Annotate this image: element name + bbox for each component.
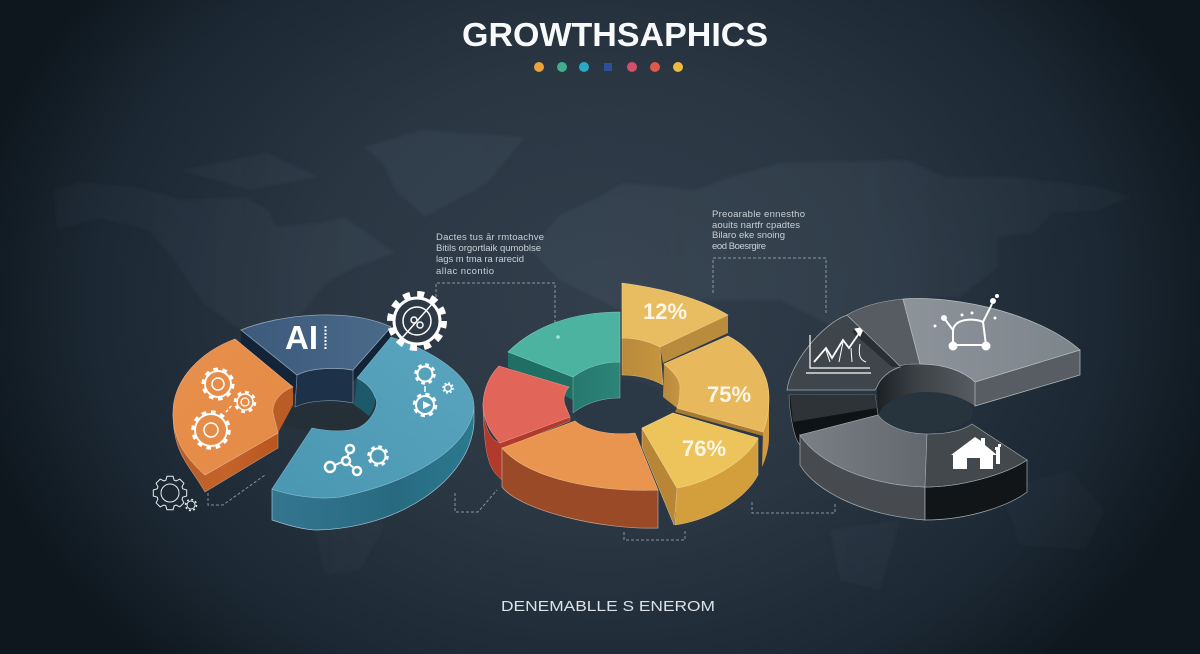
title: GROWTHSAPHICS xyxy=(462,16,768,53)
hole xyxy=(572,380,668,434)
segment: 12% xyxy=(622,283,728,385)
value: 12%: 12% xyxy=(643,299,687,324)
segment: dark stacked left xyxy=(789,395,878,445)
donut 3: grey pie xyxy=(787,294,1080,520)
icon: house xyxy=(951,437,1001,469)
text block: right annotation: aouits nartfr cpadtes xyxy=(712,220,800,231)
donut 1: AI pie xyxy=(153,294,474,530)
icon: outline gears xyxy=(153,476,196,510)
segment: blue xyxy=(272,337,474,530)
footer label: DENEMABLLE S ENEROM xyxy=(501,598,715,615)
text block: left annotation: lags m tma ra rarecid xyxy=(436,254,524,265)
icon: branching node xyxy=(934,294,998,350)
text block: left annotation: Dactes tus ār rmtoachve xyxy=(436,232,544,243)
icon: large percent gear xyxy=(390,294,444,348)
world map xyxy=(54,130,1132,590)
segment: light grey xyxy=(903,294,1080,406)
segment: 75% xyxy=(663,336,769,467)
text block: right annotation: Bilaro eke snoing xyxy=(712,230,785,241)
icon: orange gears xyxy=(193,369,255,448)
segment: orange xyxy=(502,421,658,528)
segment: orange xyxy=(173,339,293,492)
segment: mid grey xyxy=(847,299,920,366)
hole xyxy=(276,400,370,432)
segment: house xyxy=(925,424,1027,520)
segment: red xyxy=(483,366,570,480)
label: AI: AI xyxy=(285,319,318,356)
segment: 76% xyxy=(642,413,758,525)
segment: bottom light xyxy=(800,415,927,520)
icon: blue gears and network xyxy=(325,364,453,475)
inner wall xyxy=(877,364,975,415)
dashed connectors xyxy=(208,258,835,540)
text block: left annotation: allac ncontio xyxy=(436,266,494,277)
text block: right annotation: Preoarable ennestho xyxy=(712,209,805,220)
icon: growth chart xyxy=(806,327,871,373)
title colour dots xyxy=(534,62,683,72)
segment: chart grey xyxy=(787,315,900,390)
value: 75%: 75% xyxy=(707,382,751,407)
donut 2: percentage pie xyxy=(483,283,769,528)
text block: left annotation: Bitils orgortlaik qumoblse xyxy=(436,243,541,254)
text block: right annotation: eod Boesrgire xyxy=(712,241,766,252)
hole xyxy=(877,392,973,432)
value: 76%: 76% xyxy=(682,436,726,461)
segment: teal xyxy=(508,312,620,413)
segment: AI navy xyxy=(241,315,391,407)
